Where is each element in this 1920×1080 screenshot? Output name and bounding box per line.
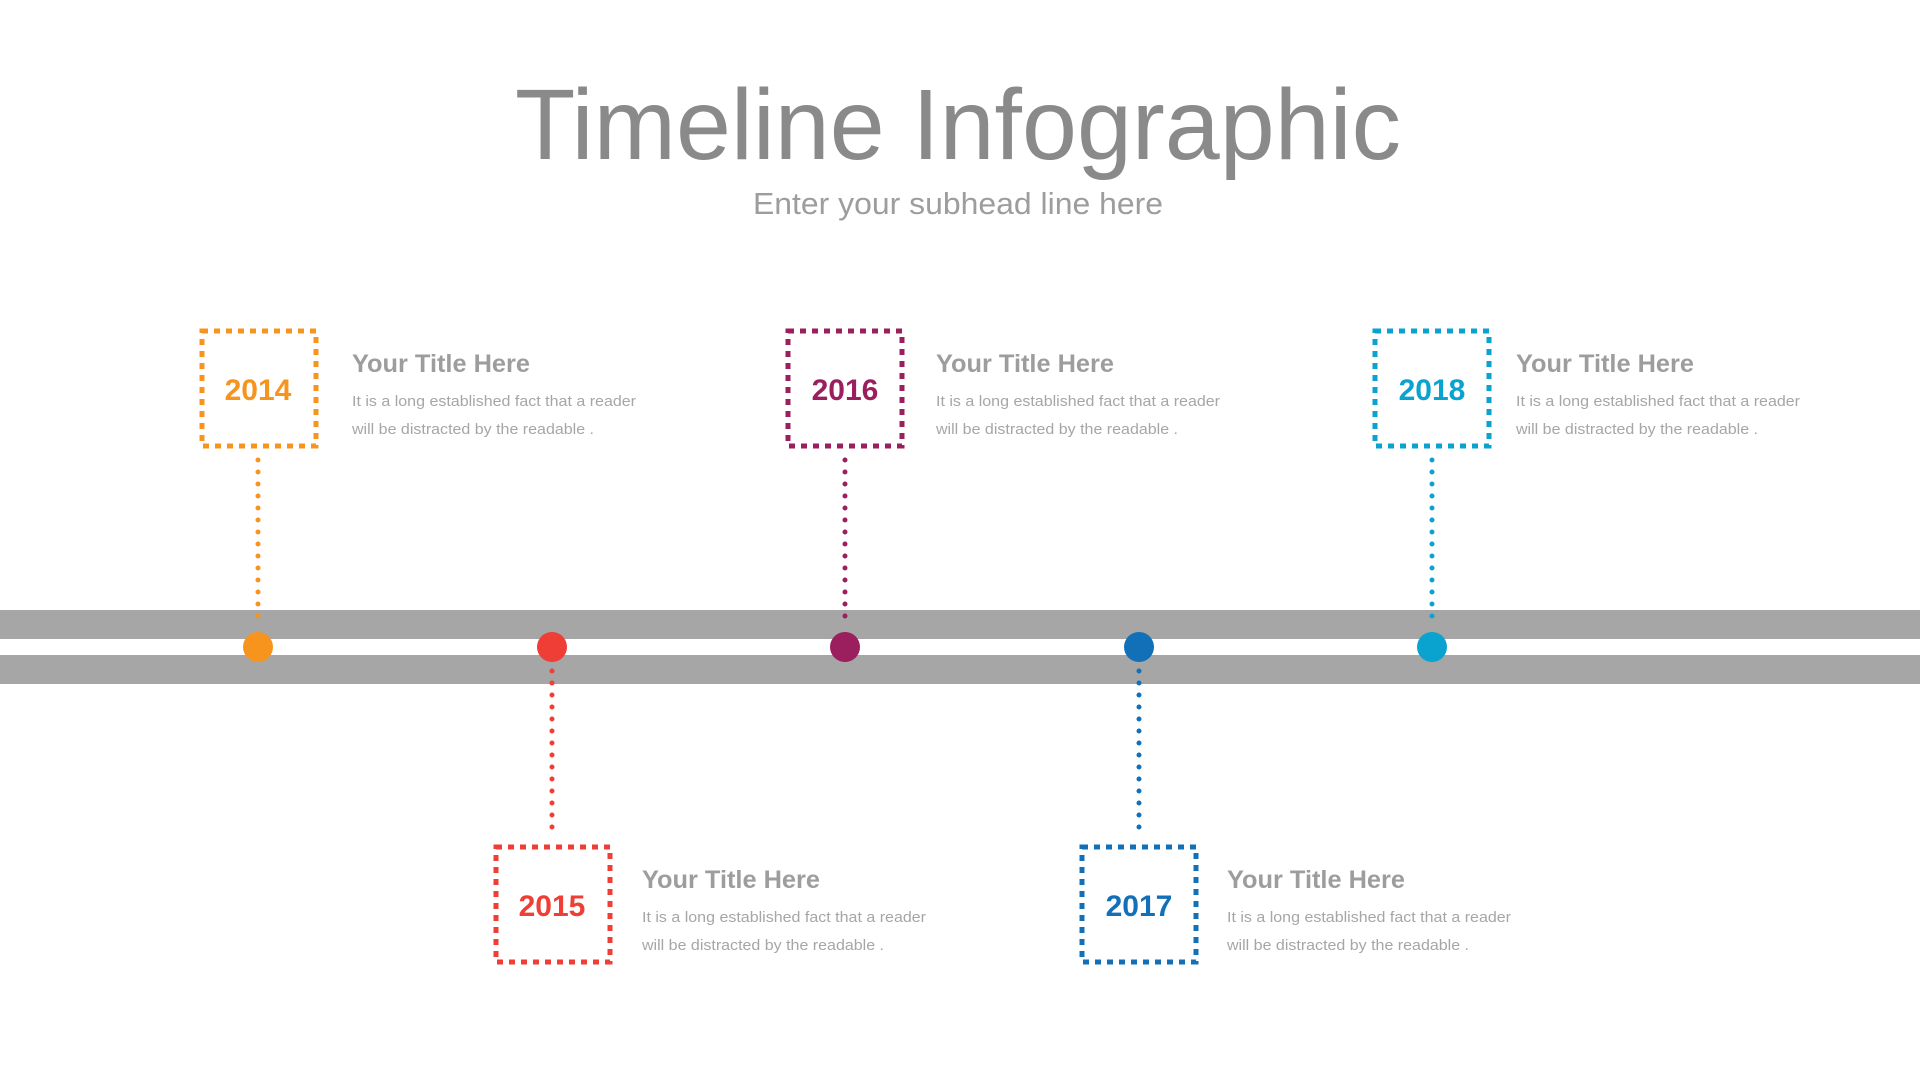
milestone 2014: Your Title Here <box>352 350 530 378</box>
title: Timeline Infographic <box>515 69 1401 181</box>
milestone 2017 <box>1082 632 1511 962</box>
milestone 2014 <box>202 331 636 662</box>
timeline bars <box>0 610 1920 684</box>
milestone 2018 <box>1375 331 1800 662</box>
milestone 2015: It is a long established fact that a reader <box>642 909 926 926</box>
milestone 2015 <box>496 632 926 962</box>
milestone 2014: 2014 <box>225 374 292 407</box>
milestone 2017: Your Title Here <box>1227 866 1405 894</box>
milestone 2016 <box>788 331 1220 662</box>
milestone 2018: It is a long established fact that a reader <box>1516 393 1800 410</box>
milestone 2018: Your Title Here <box>1516 350 1694 378</box>
milestone 2015: will be distracted by the readable . <box>641 937 884 954</box>
milestone 2014: will be distracted by the readable . <box>351 421 594 438</box>
milestone 2015: 2015 <box>519 890 585 923</box>
milestone 2018: 2018 <box>1399 374 1465 407</box>
milestone 2016: It is a long established fact that a reader <box>936 393 1220 410</box>
milestone 2018: will be distracted by the readable . <box>1515 421 1758 438</box>
milestone 2014: It is a long established fact that a reader <box>352 393 636 410</box>
milestone 2017: It is a long established fact that a reader <box>1227 909 1511 926</box>
milestone 2017: 2017 <box>1106 890 1172 923</box>
milestone 2017: will be distracted by the readable . <box>1226 937 1469 954</box>
subtitle: Enter your subhead line here <box>753 186 1163 221</box>
milestone 2015: Your Title Here <box>642 866 820 894</box>
milestone 2016: Your Title Here <box>936 350 1114 378</box>
milestone 2016: will be distracted by the readable . <box>935 421 1178 438</box>
milestone 2016: 2016 <box>812 374 878 407</box>
